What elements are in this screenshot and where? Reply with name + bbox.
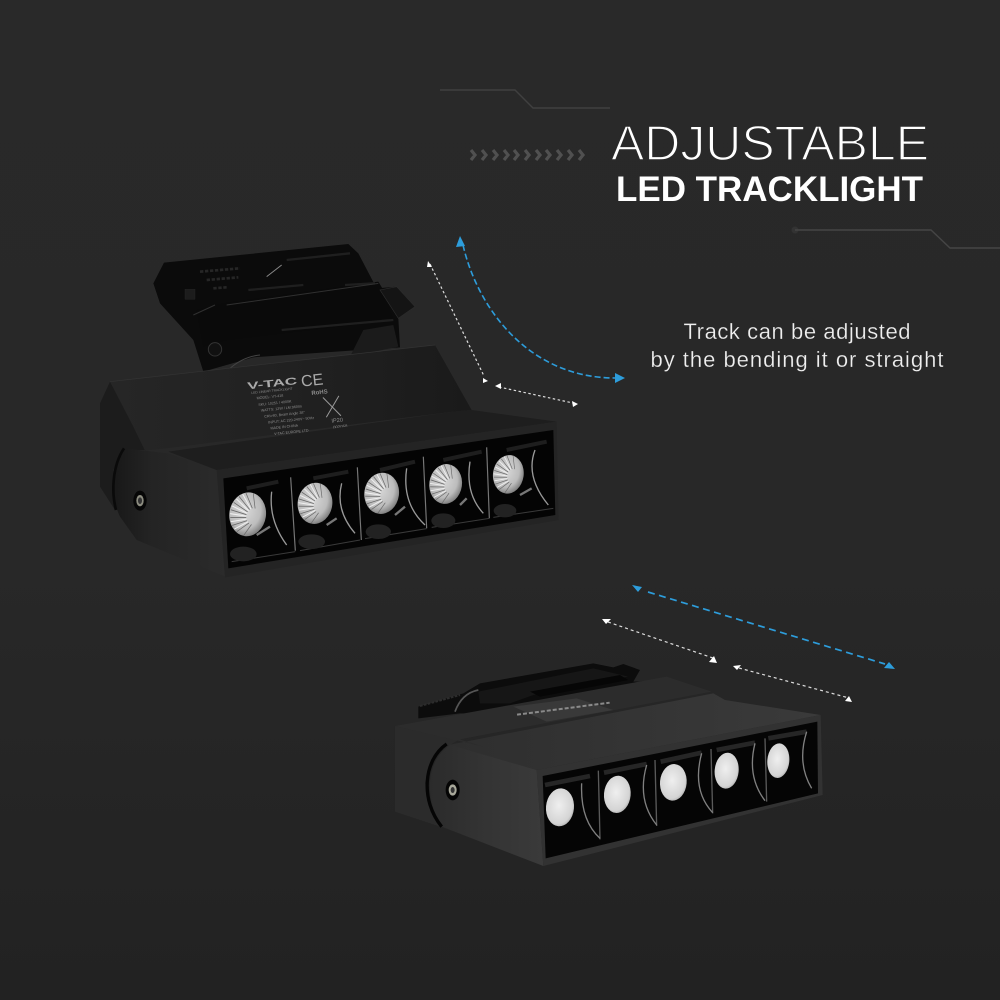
arrow: white dotted segment 2 — [733, 665, 852, 702]
product label — [247, 369, 348, 438]
product label: 002058 — [333, 423, 348, 430]
arrow: blue curved bend — [456, 236, 625, 383]
product label: MODEL: VT-418 — [256, 394, 284, 400]
product label: RoHS — [311, 389, 328, 397]
arrow: white dotted segment 1 — [602, 619, 717, 663]
hex screw — [133, 491, 147, 511]
title — [611, 117, 929, 209]
lens bay — [543, 722, 818, 858]
product label: WATTS: 12W / LM:960lm — [261, 404, 302, 413]
description text: by the bending it or straight — [650, 347, 944, 372]
LED lens 2 — [602, 775, 632, 814]
product label: MADE IN CHINA — [270, 424, 299, 430]
product label: CRI>80, Beam Angle 38° — [264, 410, 306, 419]
LED lens 5 — [766, 742, 791, 779]
LED lens 5 — [490, 453, 526, 496]
side of body — [114, 448, 225, 577]
product label: SKU: 10251 / 4000K — [258, 399, 292, 407]
LED lens 2 — [295, 480, 335, 526]
LED lens 3 — [658, 763, 688, 802]
LED lens 1 — [544, 787, 576, 827]
LED lens 3 — [362, 470, 402, 516]
top surface of body — [448, 693, 821, 770]
product: upper tracklight — [100, 244, 559, 577]
decorative circuit line: top — [440, 90, 610, 108]
side of body — [430, 745, 543, 866]
top surface of body — [168, 410, 557, 470]
title: ADJUSTABLE — [611, 117, 929, 171]
left end cap — [100, 382, 147, 510]
title: LED TRACKLIGHT — [616, 170, 923, 209]
track adapter — [418, 663, 673, 718]
product label: CE — [300, 371, 324, 391]
arrow: blue straight track — [632, 585, 895, 669]
product label: V-TAC — [247, 376, 298, 392]
product: lower tracklight — [395, 663, 823, 866]
arrow: white dotted vertical track — [427, 261, 488, 383]
product label: IP20 — [331, 418, 343, 425]
product label: INPUT: AC 220-240V~ 50Hz — [268, 416, 314, 425]
lower reflections — [230, 504, 516, 561]
chevron row — [471, 150, 583, 160]
decorative circuit line: right — [792, 226, 1000, 248]
LED lens 4 — [713, 752, 740, 790]
glossy reflector bands — [545, 732, 807, 785]
left end cap — [395, 726, 458, 827]
reflector arcs — [582, 732, 812, 838]
bay dividers — [291, 447, 489, 551]
front face of body — [217, 422, 559, 577]
description text: Track can be adjusted — [684, 319, 910, 344]
hex screw — [446, 780, 460, 800]
description text — [650, 319, 944, 372]
top cover flap — [395, 677, 712, 747]
lens bay — [223, 430, 555, 568]
LED lens 4 — [427, 462, 465, 506]
arrow: white dotted horizontal track — [495, 383, 578, 407]
LED lens 1 — [226, 490, 269, 539]
track adapter — [153, 244, 415, 372]
product label: LED LINEAR TRACKLIGHT — [251, 387, 293, 395]
front face of body — [537, 715, 823, 866]
bottom sill reflections — [232, 508, 553, 562]
product label: V-TAC EUROPE LTD — [274, 428, 309, 436]
bay dividers — [598, 738, 767, 839]
top cover flap with label — [110, 345, 472, 451]
reflector curves — [271, 450, 548, 545]
